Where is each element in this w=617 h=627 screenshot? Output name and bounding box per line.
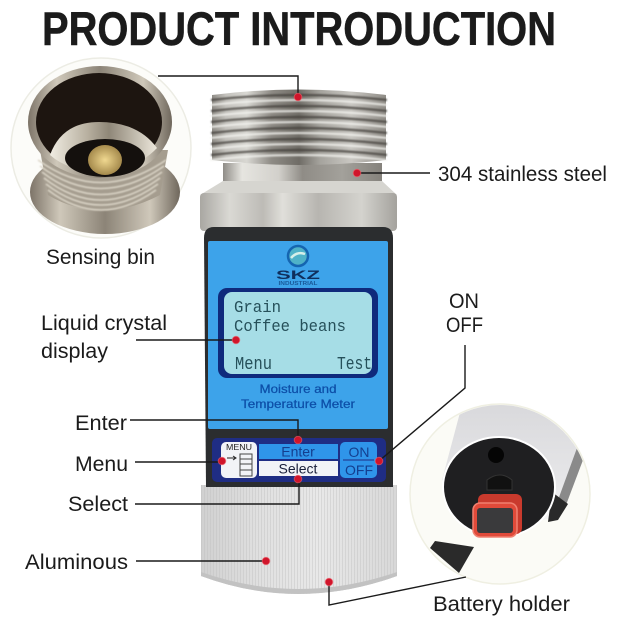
flange of the sensing bin bbox=[30, 150, 180, 234]
brass sensor tip bbox=[88, 145, 122, 175]
SKZ logo: INDUSTRIAL bbox=[278, 281, 318, 287]
panel: sensing bin inset bbox=[11, 58, 191, 238]
on off button: OFF bbox=[345, 462, 373, 478]
on off button: ON bbox=[348, 444, 370, 460]
threaded head bbox=[200, 90, 397, 195]
on off button bbox=[340, 442, 377, 478]
callout labels: Enter bbox=[75, 412, 127, 435]
callout labels bbox=[25, 163, 607, 616]
product name bbox=[241, 382, 355, 411]
bin rim bbox=[28, 66, 172, 178]
callout labels: Sensing bin bbox=[46, 246, 155, 269]
callout labels: Battery holder bbox=[433, 593, 570, 616]
menu button bbox=[221, 442, 257, 478]
leader lines bbox=[130, 76, 466, 605]
black front housing bbox=[204, 227, 393, 487]
panel: battery holder inset bbox=[410, 404, 590, 584]
menu button: MENU bbox=[226, 442, 252, 452]
enter button bbox=[259, 444, 338, 460]
product name: Moisture and bbox=[260, 382, 336, 396]
callout labels: 304 stainless steel bbox=[438, 163, 607, 186]
LCD text: Coffee beans bbox=[234, 317, 346, 336]
LCD display bbox=[218, 288, 378, 378]
threaded body bbox=[40, 150, 168, 210]
red marker dots bbox=[218, 93, 383, 586]
callout labels: display bbox=[41, 340, 109, 363]
LCD text bbox=[234, 298, 372, 375]
product name: Temperature Meter bbox=[241, 397, 355, 411]
select button bbox=[259, 460, 338, 476]
callout labels: OFF bbox=[446, 314, 483, 337]
callout labels: Aluminous bbox=[25, 551, 128, 574]
red battery latch bbox=[473, 494, 522, 537]
blue front panel bbox=[208, 241, 388, 429]
LCD text: Menu bbox=[235, 355, 272, 375]
SKZ logo bbox=[276, 246, 320, 287]
screw hole bbox=[488, 447, 504, 463]
steel collar bbox=[200, 193, 397, 231]
callout labels: ON bbox=[449, 290, 479, 313]
select button: Select bbox=[279, 460, 318, 476]
dark bin interior bbox=[36, 73, 162, 171]
callout labels: Liquid crystal bbox=[41, 312, 167, 335]
LCD text: Grain bbox=[234, 298, 281, 317]
dark clip bbox=[430, 541, 474, 573]
callout labels: Select bbox=[68, 493, 128, 516]
enter button: Enter bbox=[281, 444, 315, 460]
device: moisture meter bbox=[200, 90, 397, 594]
round recess bbox=[443, 437, 555, 537]
SKZ logo: SKZ bbox=[276, 268, 320, 282]
LCD text: Test bbox=[337, 355, 372, 375]
callout labels: Menu bbox=[75, 453, 128, 476]
knurled aluminium base bbox=[201, 485, 397, 594]
button panel bbox=[212, 438, 386, 482]
